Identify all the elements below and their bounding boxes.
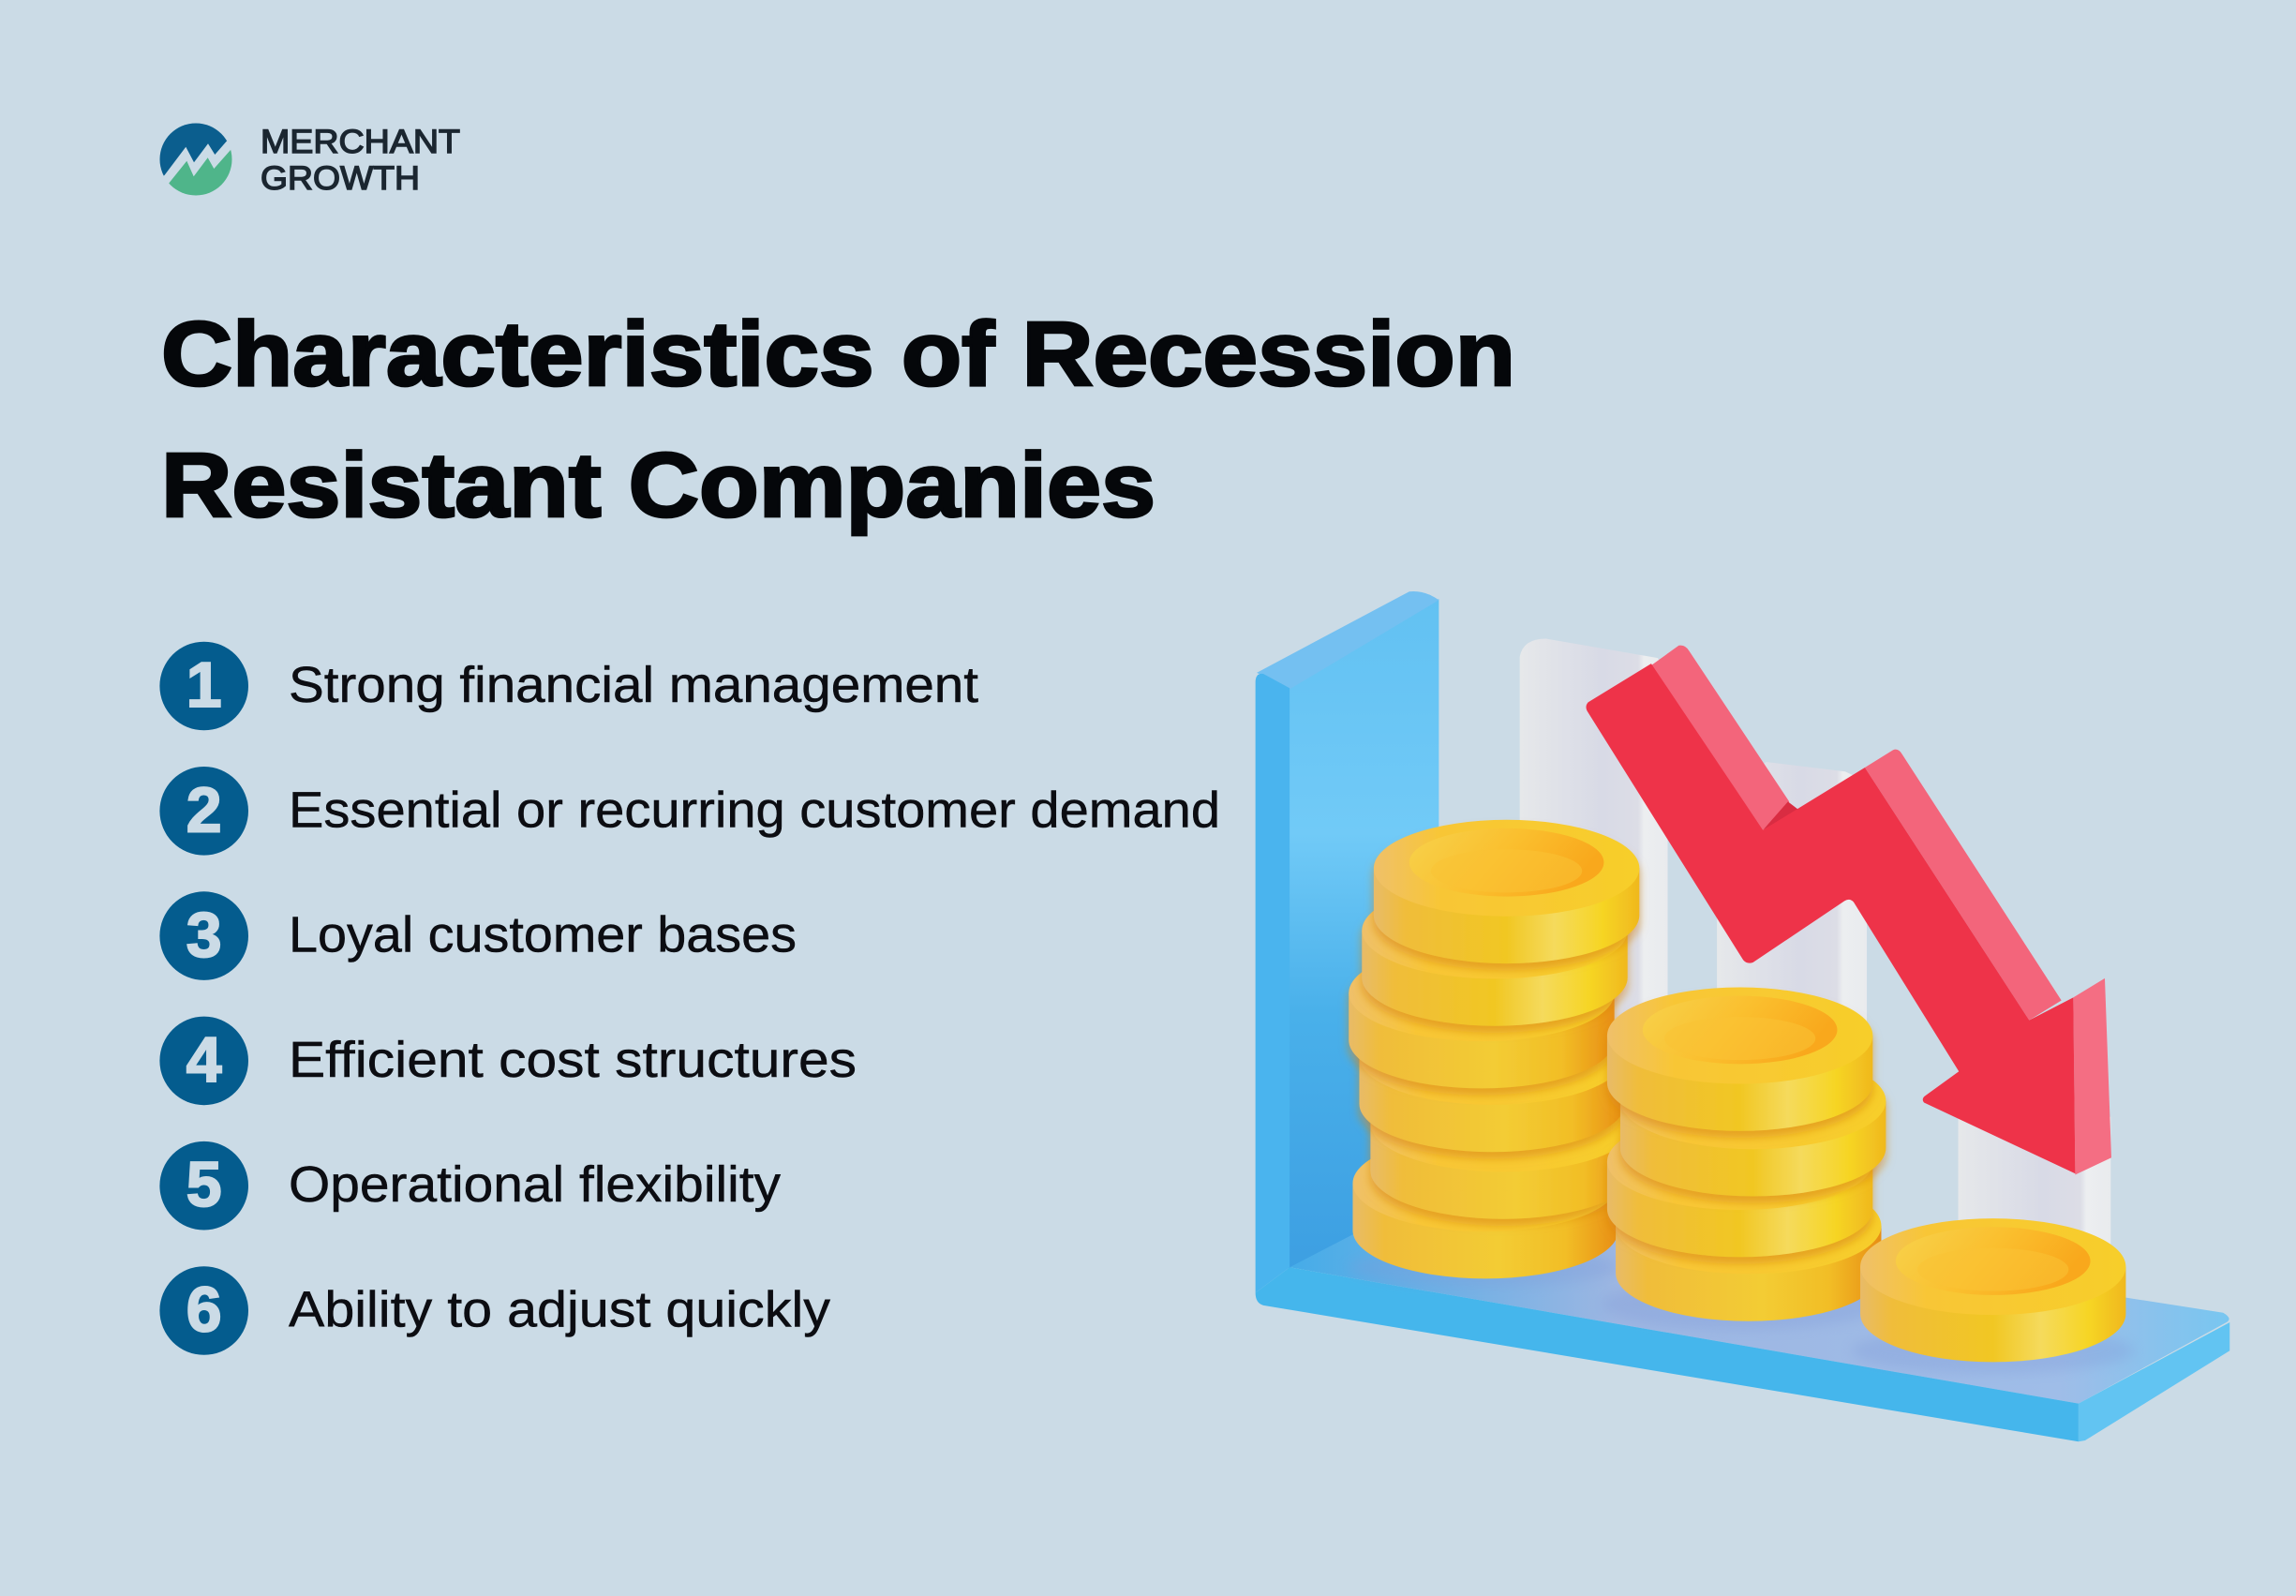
single coin	[1860, 1218, 2125, 1362]
bar 2	[1717, 762, 1867, 1111]
coin shadows on floor	[1349, 1247, 2135, 1374]
bar 1	[1520, 638, 1667, 1140]
red falling arrow	[1586, 646, 2111, 1174]
floor top face	[1290, 1190, 2229, 1404]
illustration: falling chart with coins	[1256, 591, 2229, 1441]
list item 5	[159, 1141, 781, 1230]
chart frame: blue L shape	[1256, 591, 2229, 1441]
numbered list	[159, 642, 1220, 1355]
list item 5: 5	[186, 1149, 222, 1220]
base front edge	[1256, 1267, 2079, 1441]
logo: Merchant Growth	[159, 124, 460, 195]
base end face	[2079, 1322, 2229, 1441]
wall inner face	[1289, 599, 1439, 1269]
wall top face	[1257, 591, 1439, 689]
title: Resistant Companies	[161, 434, 1155, 536]
list item 5: Operational flexibility	[289, 1156, 781, 1213]
arrow side faces	[1651, 646, 1789, 830]
list item 1: Strong financial management	[289, 657, 978, 713]
wall front edge	[1256, 674, 1290, 1292]
bar 3	[1959, 1117, 2110, 1287]
arrow front face	[1586, 664, 2075, 1173]
list item 3: 3	[186, 900, 222, 971]
list item 4: Efficient cost structures	[289, 1032, 857, 1088]
logo wordmark: MERCHANT	[261, 124, 460, 160]
list item 1: 1	[186, 649, 222, 721]
white bars	[1520, 638, 2110, 1287]
left coin stack	[1349, 820, 1639, 1278]
logo wordmark: GROWTH	[261, 160, 420, 197]
logo wordmark	[261, 124, 460, 197]
list item 3	[159, 891, 797, 980]
list item 3: Loyal customer bases	[289, 907, 797, 963]
list item 2: Essential or recurring customer demand	[289, 782, 1220, 838]
list item 4: 4	[186, 1024, 222, 1096]
list item 4	[159, 1017, 857, 1105]
right coin stack	[1607, 988, 1886, 1321]
list item 2: 2	[186, 774, 222, 845]
icon: logo mark	[159, 124, 232, 195]
list item 1	[159, 642, 978, 730]
title	[161, 303, 1515, 536]
list item 6	[159, 1266, 830, 1355]
list item 6: Ability to adjust quickly	[289, 1282, 830, 1338]
title: Characteristics of Recession	[161, 303, 1515, 405]
list item 6: 6	[186, 1275, 222, 1346]
list item 2	[159, 767, 1220, 856]
